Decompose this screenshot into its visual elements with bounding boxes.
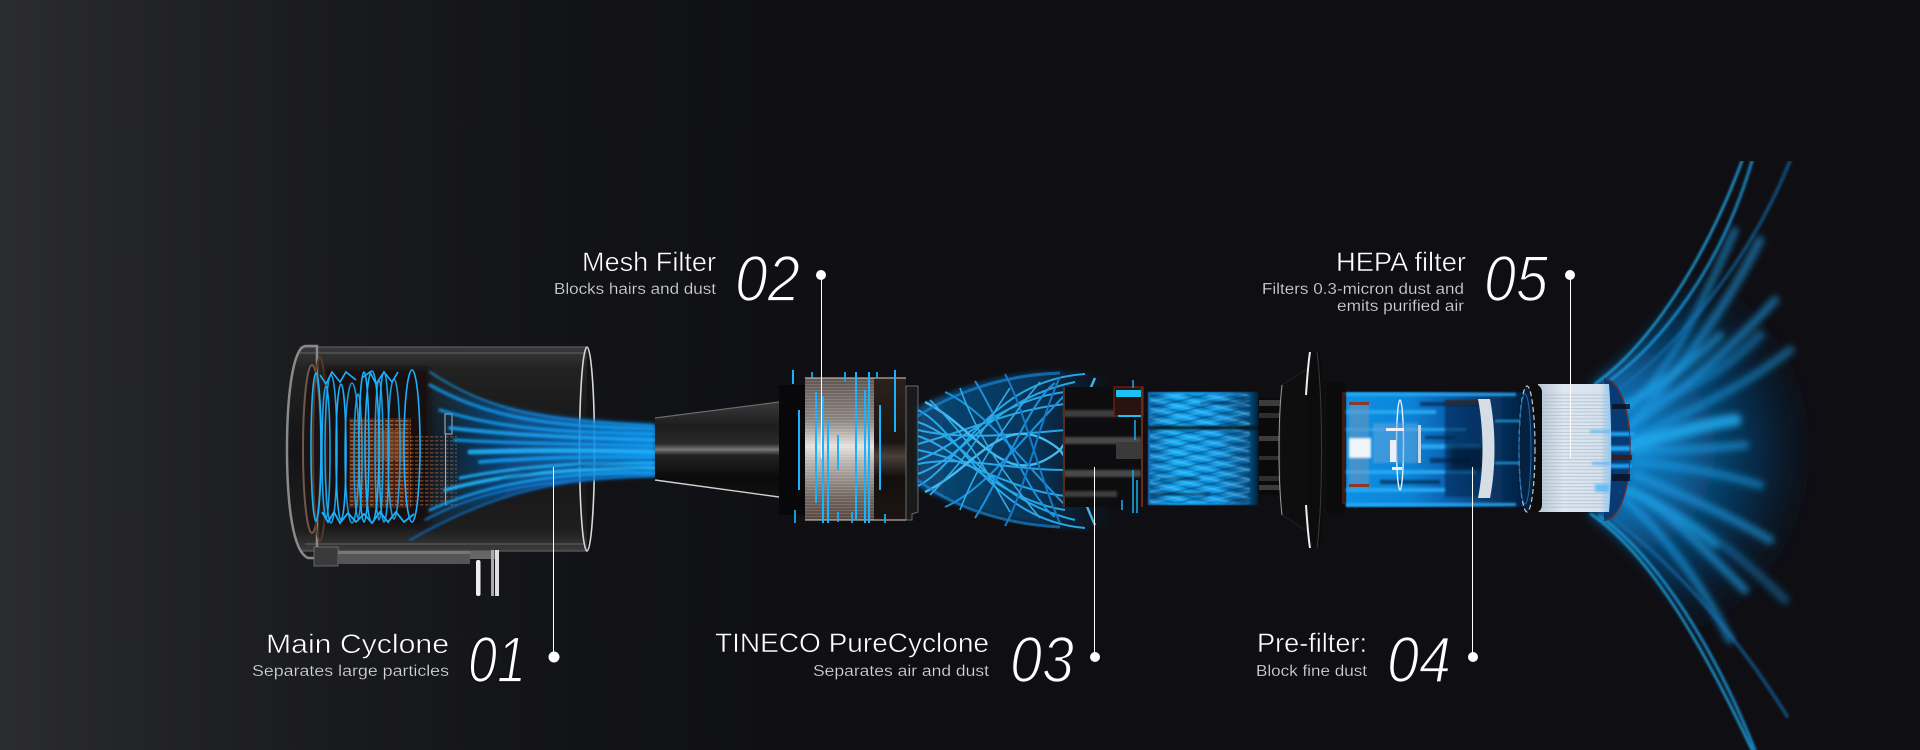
callout 02: Mesh Filter	[554, 242, 826, 458]
leader line 05	[1570, 278, 1572, 458]
description 01: Separates large particles	[252, 663, 449, 680]
component: mesh filter	[779, 370, 918, 523]
comb teeth	[1259, 398, 1285, 495]
airflow: cyclone helix loops	[311, 370, 420, 523]
callout 04: Pre-filter	[1256, 467, 1478, 696]
component: cone adapter	[655, 402, 779, 497]
number 01: 01	[468, 623, 526, 696]
heading 04: Pre-filter:	[1257, 628, 1367, 658]
heading 05: HEPA filter	[1336, 247, 1466, 277]
component: main cyclone dust cup	[287, 346, 594, 596]
leader line 04	[1472, 467, 1474, 655]
cyclone tubes	[1063, 410, 1141, 497]
number 05: 05	[1484, 242, 1549, 315]
description 03: Separates air and dust	[813, 663, 990, 680]
pre-filter white ring	[1478, 399, 1494, 498]
number 02: 02	[735, 242, 800, 315]
flange rear collar	[1326, 382, 1346, 513]
heading 01: Main Cyclone	[266, 629, 449, 659]
marker dot 01	[548, 652, 560, 662]
marker dot 03	[1090, 652, 1100, 662]
component: pre-filter stage with blue flow	[1346, 392, 1525, 507]
mesh screen	[805, 378, 874, 520]
handle and prongs	[314, 547, 499, 596]
HEPA pleated body	[1538, 384, 1611, 512]
dark pre-filter body	[1445, 400, 1481, 497]
blue flow ticks	[793, 370, 895, 523]
description 05	[1262, 281, 1464, 315]
marker dot 02	[816, 270, 826, 280]
description 02: Blocks hairs and dust	[554, 281, 717, 298]
flange cone	[1280, 368, 1309, 532]
mesh filter housing	[874, 378, 906, 520]
number 03: 03	[1010, 623, 1074, 696]
airflow: converging stream into cone	[410, 372, 655, 540]
HEPA rear cap	[1604, 378, 1631, 521]
marker dot 05	[1565, 270, 1575, 280]
airflow: exhaust plume	[1590, 161, 1816, 750]
leader line 03	[1094, 467, 1096, 655]
cup label graphic	[349, 414, 457, 508]
description 05: emits purified air	[1337, 298, 1464, 315]
description 05: Filters 0.3-micron dust and	[1262, 281, 1464, 298]
cup right edge ellipse	[580, 347, 594, 551]
leader line 01	[552, 467, 554, 655]
cup left rim	[287, 346, 317, 558]
component: black flange and comb	[1259, 352, 1346, 548]
leader line 02	[820, 278, 822, 458]
callout 03: TINECO PureCyclone	[715, 467, 1100, 696]
description 04: Block fine dust	[1256, 663, 1368, 680]
component: HEPA filter	[1519, 378, 1634, 521]
component: TINECO PureCyclone	[1063, 380, 1143, 513]
cup body	[287, 347, 587, 551]
heading 03: TINECO PureCyclone	[715, 628, 989, 658]
red top block with cyan window	[1114, 387, 1143, 416]
callout 01: Main Cyclone	[252, 467, 560, 696]
callout 05: HEPA filter	[1262, 242, 1575, 458]
marker dot 04	[1468, 652, 1478, 662]
number 04: 04	[1387, 623, 1451, 696]
heading 02: Mesh Filter	[582, 247, 716, 277]
motor parts	[1349, 400, 1421, 490]
airflow: hatched stream block	[1148, 392, 1258, 505]
flange disc	[1307, 352, 1324, 548]
HEPA front ring	[1526, 384, 1542, 513]
airflow: weaving stream after mesh filter	[918, 371, 1115, 530]
cup interior shadow	[325, 368, 430, 526]
